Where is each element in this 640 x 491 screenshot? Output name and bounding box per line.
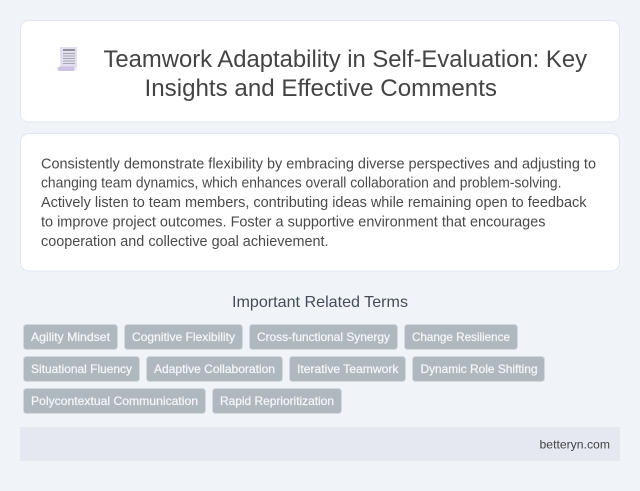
tag: Iterative Teamwork	[290, 356, 406, 382]
icon: document scroll	[58, 47, 78, 71]
tag: Polycontextual Communication: Polycontextual Communication	[31, 394, 198, 408]
tag: Iterative Teamwork: Iterative Teamwork	[297, 362, 400, 376]
tag: Cross-functional Synergy: Cross-functional Synergy	[257, 330, 390, 344]
tag: Dynamic Role Shifting: Dynamic Role Shifting	[420, 362, 538, 376]
title: Insights and Effective Comments	[144, 75, 497, 102]
tag: Adaptive Collaboration	[146, 356, 282, 382]
heading: important related terms: Important Related Terms	[232, 294, 408, 311]
panel: summary card	[20, 134, 620, 271]
tag: Change Resilience	[404, 324, 518, 350]
footer source: betteryn.com	[540, 438, 610, 452]
tag: Change Resilience: Change Resilience	[412, 330, 510, 344]
tag: Agility Mindset	[24, 324, 118, 350]
tag: Situational Fluency: Situational Fluency	[31, 362, 132, 376]
summary text: cooperation and collective goal achievement.	[41, 234, 328, 250]
tag: Adaptive Collaboration: Adaptive Collaboration	[154, 362, 275, 376]
summary text: changing team dynamics, which enhances overall collaboration and problem-solving.	[41, 176, 562, 192]
summary text: to improve project outcomes. Foster a supportive environment that encourages	[41, 214, 546, 230]
footer bar	[20, 427, 620, 461]
tag: Cognitive Flexibility: Cognitive Flexibility	[132, 330, 235, 344]
tag list	[24, 324, 544, 414]
summary text: Consistently demonstrate flexibility by embracing diverse perspectives and adjusting to	[41, 156, 596, 172]
tag: Situational Fluency	[24, 356, 140, 382]
tag: Cognitive Flexibility	[124, 324, 242, 350]
summary text	[41, 156, 596, 250]
tag: Rapid Reprioritization: Rapid Reprioritization	[220, 394, 334, 408]
tag: Agility Mindset: Agility Mindset	[31, 330, 111, 344]
tag: Cross-functional Synergy	[250, 324, 398, 350]
title: Teamwork Adaptability in Self-Evaluation: Key	[104, 46, 587, 73]
panel: title card	[20, 20, 620, 122]
tag: Dynamic Role Shifting	[412, 356, 544, 382]
title	[104, 46, 587, 102]
summary text: Actively listen to team members, contributing ideas while remaining open to feedback	[41, 195, 587, 211]
tag: Rapid Reprioritization	[212, 388, 342, 414]
tag: Polycontextual Communication	[24, 388, 206, 414]
